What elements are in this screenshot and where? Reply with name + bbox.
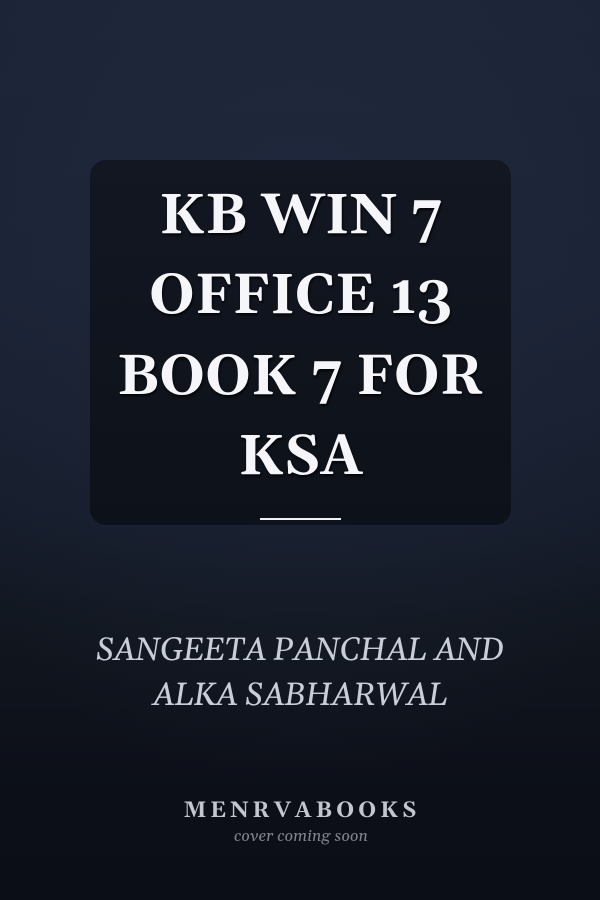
publisher name: MENRVABOOKS <box>184 797 420 825</box>
panel: title box <box>90 160 511 525</box>
title <box>117 182 484 494</box>
rule under title <box>260 518 341 520</box>
cover note: cover coming soon <box>234 827 368 847</box>
author names: ALKA SABHARWAL <box>153 675 447 716</box>
title: KB WIN 7 <box>159 182 442 253</box>
author names <box>96 630 504 716</box>
title: BOOK 7 FOR <box>117 343 484 414</box>
title: OFFICE 13 <box>149 262 452 333</box>
author names: SANGEETA PANCHAL AND <box>96 630 504 671</box>
title: KSA <box>238 423 363 494</box>
